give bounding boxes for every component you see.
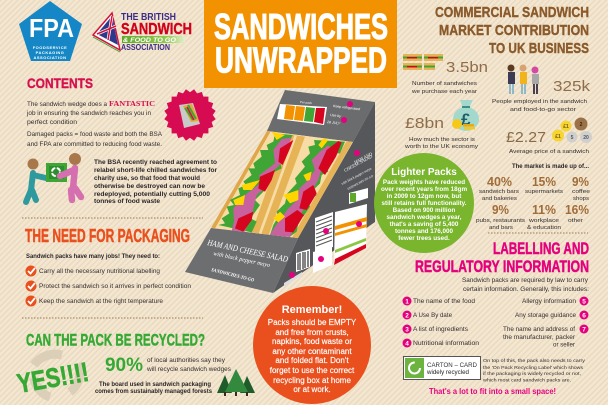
- heading: can the pack be recycled: CAN THE PACK BE RECYCLED?: [26, 330, 205, 350]
- stat: 325k: [492, 78, 591, 113]
- stat: 325k: 325k: [553, 78, 591, 95]
- pack top face: [267, 90, 375, 142]
- top face labels: [277, 100, 361, 126]
- checklist: Carry all the necessary nutritional labelling: [39, 269, 160, 275]
- panel: lighter packs: Pack weights have reduced: [383, 179, 465, 186]
- panel: lighter packs: tonnes and 176,000: [395, 228, 454, 235]
- logo: British Sandwich Association: [93, 12, 192, 52]
- front text: HAM AND CHEESE SALAD: [206, 237, 290, 264]
- stats: market breakdown: shops: [573, 196, 589, 202]
- panel: remember: any other contaminant: [272, 347, 352, 356]
- text: on pack recycling label: On top of this, the pack also needs to carry: [483, 358, 586, 364]
- text: packaging intro: Sandwich packs have many jobs! They need to:: [26, 254, 160, 260]
- text: BSA agreement: otherwise be destroyed can now be: [94, 184, 206, 190]
- text: labelling intro: Sandwich packs are required by law to carry: [462, 278, 588, 284]
- side text: with black pepper mayo: [341, 166, 372, 186]
- panel: remember: [253, 286, 371, 404]
- left filling: [218, 133, 293, 232]
- icon: carton recycling label: CARTON – CARD: [427, 363, 478, 369]
- text: BSA agreement: redeployed, potentially cutting 5,000: [94, 192, 211, 198]
- side text: HAM AND: [352, 151, 374, 165]
- sandwich window: [211, 131, 353, 238]
- panel: lighter packs: Lighter Packs: [391, 167, 457, 178]
- checklist: Keep the sandwich at the right temperature: [39, 299, 164, 305]
- text: contents intro: perfect condition: [27, 120, 77, 126]
- stats: market breakdown: 16%: [565, 202, 589, 217]
- panel: remember: Remember!: [282, 304, 342, 316]
- stat: average price: Average price of a sandwich: [509, 149, 589, 155]
- panel: remember: or at work.: [293, 385, 331, 394]
- list: label requirements: Allergy information: [522, 299, 576, 305]
- text: local authorities: will recycle sandwich wedges: [146, 367, 231, 373]
- stats: market breakdown: 40%: [487, 174, 512, 189]
- panel: remember: napkins, food waste or: [272, 337, 352, 346]
- stat: 325k: People employed in the sandwich: [492, 99, 587, 105]
- stat: 325k: and food-to-go sector: [510, 107, 576, 113]
- stat: 3.5bn: we purchase each year: [411, 89, 477, 95]
- list: label requirements: 2: [405, 312, 409, 320]
- text: yes: YES!!!!: [15, 357, 91, 399]
- stats: market breakdown: & education: [527, 225, 561, 231]
- list: label requirements: Any storage guidance: [515, 313, 577, 319]
- title banner: SANDWICHES: [214, 6, 388, 47]
- panel: lighter packs: sandwich wedges a year,: [387, 214, 462, 221]
- stat: average price: [506, 129, 589, 155]
- heading: need for packaging: THE NEED FOR PACKAGING: [25, 226, 190, 246]
- stats: market breakdown: 15%: [532, 174, 556, 189]
- callout: small space: That's a lot to fit into a small space!: [429, 387, 556, 396]
- stats: market breakdown: 9%: [492, 202, 509, 217]
- pack number badges: [289, 101, 362, 278]
- text: sustainable board: [95, 382, 213, 395]
- side text: SANDWICHES-TO-GO: [347, 174, 374, 191]
- panel: lighter packs: still retains full functionality.: [382, 200, 467, 207]
- stat: 90 percent: 90%: [105, 355, 143, 376]
- checklist: [26, 266, 191, 306]
- icon: coins: 20: [583, 135, 589, 141]
- list: label requirements: A Use By date: [413, 313, 453, 319]
- text: sustainable board: The board used in sandwich packaging: [99, 382, 211, 388]
- list: label requirements: 6: [582, 312, 586, 320]
- icon: money bag: £: [461, 110, 471, 129]
- panel: lighter packs: [374, 153, 474, 253]
- logo: FPA: [19, 1, 82, 61]
- text: contents intro: The sandwich wedge does a: [27, 102, 108, 108]
- text: on pack recycling label: [483, 358, 586, 384]
- icon: people: [508, 64, 539, 94]
- stats: market breakdown: supermarkets: [525, 189, 563, 195]
- list: label requirements: 4: [405, 340, 409, 348]
- panel: lighter packs: Based on 900 million: [393, 207, 455, 214]
- logo: British Sandwich Association: & FOOD TO GO: [123, 38, 176, 44]
- heading: contents: CONTENTS: [27, 75, 93, 91]
- list: label requirements: or seller: [553, 342, 575, 348]
- stats: market breakdown: and bars: [489, 225, 513, 231]
- text: BSA agreement: The BSA recently reached agreement to: [94, 160, 217, 166]
- panel: lighter packs: in 2009 to 12gm now, but: [387, 193, 462, 200]
- icon: coins: 2: [580, 122, 583, 128]
- top face labels: Keep refrigerated: [333, 104, 361, 111]
- front text: with black pepper mayo: [213, 251, 271, 269]
- front text: SANDWICHES-TO-GO: [211, 268, 255, 284]
- pack side face: [273, 102, 375, 293]
- list: label requirements: [402, 296, 588, 348]
- logo: FPA: FPA: [29, 13, 74, 43]
- text: contents intro: Damaged packs = food waste and both the BSA: [27, 132, 162, 138]
- panel: lighter packs: over recent years from 18gm: [381, 186, 467, 193]
- text: contents intro: job in ensuring the sandwich reaches you in: [26, 111, 151, 117]
- icon: money bag: [452, 100, 479, 131]
- text: contents intro: FANTASTIC: [109, 99, 155, 108]
- side text: [341, 151, 374, 191]
- icon: coins: £1: [563, 124, 569, 130]
- text: contents intro: and FPA are committed to reducing food waste.: [27, 142, 162, 148]
- panel: remember: and free from crusts,: [275, 328, 349, 337]
- list: label requirements: 3: [405, 326, 409, 334]
- stats: market breakdown: and bakeries: [482, 196, 517, 202]
- top face labels: Per pack: [300, 100, 313, 105]
- checklist: Protect the sandwich so it arrives in perfect condition: [39, 284, 191, 290]
- text: local authorities: [146, 358, 231, 373]
- list: label requirements: 1: [405, 298, 409, 306]
- list: label requirements: The name and address of: [503, 327, 575, 333]
- text: labelling intro: [462, 278, 589, 293]
- icon: coins: 5: [571, 135, 574, 141]
- icon: carton recycling label: widely recycled: [426, 370, 469, 376]
- icon: recycling arrows behind yes: [34, 354, 80, 397]
- stats: market breakdown: pubs, restaurants: [476, 218, 525, 224]
- panel: remember: recycling box at home: [273, 376, 351, 385]
- text: contents intro: [26, 99, 162, 148]
- stat: 8bn: How much the sector is: [409, 137, 475, 143]
- logo: FPA: FOODSERVICE: [33, 45, 67, 50]
- text: sustainable board: comes from sustainably managed forests: [95, 389, 213, 395]
- stat: 3.5bn: [411, 59, 488, 95]
- right filling: [270, 140, 345, 237]
- logo: FPA: ASSOCIATION: [34, 55, 66, 60]
- stat: 8bn: [404, 115, 478, 150]
- stats: market breakdown: sandwich bars: [479, 189, 519, 195]
- title banner: [204, 0, 397, 88]
- icon: coins: £1: [555, 134, 561, 140]
- icon: people passing recycling box: [26, 153, 81, 202]
- icon: trees: [217, 369, 255, 396]
- title banner: UNWRAPPED: [215, 40, 387, 80]
- list: label requirements: the manufacturer, packer: [503, 335, 575, 341]
- logo: British Sandwich Association: THE BRITISH: [121, 12, 176, 23]
- text: market made up: The market is made up of...: [512, 164, 589, 170]
- text: BSA agreement: [94, 160, 218, 205]
- text: local authorities: of local authorities say they: [147, 358, 225, 364]
- panel: lighter packs: that's a saving of 5,400: [390, 221, 459, 228]
- panel: remember: and folded flat. Don't: [275, 356, 349, 365]
- stat: 8bn: worth to the UK economy: [404, 144, 478, 150]
- stats: market breakdown: 9%: [572, 174, 589, 189]
- stats: market breakdown: other: [568, 218, 583, 224]
- panel: remember: forget to use the correct: [270, 366, 355, 375]
- side text: CHEESE SALAD: [343, 153, 374, 173]
- text: BSA agreement: relabel short-life chilled sandwiches for: [94, 168, 218, 174]
- panel: lighter packs: fewer trees used.: [398, 235, 450, 242]
- stat: 3.5bn: 3.5bn: [446, 59, 488, 76]
- icon: coins: [552, 118, 592, 143]
- list: label requirements: 5: [582, 298, 586, 306]
- stat: average price: £2.27: [506, 129, 546, 146]
- text: BSA agreement: charity use, so that food that would: [94, 176, 200, 182]
- stat: 3.5bn: Number of sandwiches: [412, 81, 477, 87]
- stats: market breakdown: workplace: [528, 218, 559, 224]
- logo: British Sandwich Association: SANDWICH: [121, 21, 192, 38]
- text: BSA agreement: tonnes of food waste: [94, 199, 161, 205]
- text: labelling intro: certain information. Generally, this includes:: [463, 287, 589, 293]
- top face labels: 28 JULY: [326, 120, 341, 126]
- text: on pack recycling label: which most card sandwich packs are.: [483, 378, 571, 384]
- illustration: sandwich pack: [185, 90, 375, 293]
- side face labels: [284, 188, 368, 287]
- stat: 8bn: £8bn: [405, 115, 444, 132]
- heading: market contribution: [435, 4, 589, 57]
- list: label requirements: Nutritional information: [413, 341, 479, 347]
- icon: sandwiches: [403, 54, 443, 70]
- stats: market breakdown: 11%: [532, 202, 556, 217]
- list: label requirements: The name of the food: [413, 299, 475, 305]
- logo: British Sandwich Association: ASSOCIATION: [121, 42, 170, 52]
- list: label requirements: 7: [582, 326, 586, 334]
- pack front face: [185, 228, 298, 293]
- panel: remember: Packs should be EMPTY: [268, 318, 357, 327]
- stats: market breakdown: [476, 174, 590, 231]
- text: on pack recycling label: the 'On Pack Recycling Label' which shows: [483, 365, 584, 371]
- text: on pack recycling label: if the packaging is widely recycled or not,: [483, 371, 581, 377]
- logo: FPA: PACKAGING: [36, 50, 64, 55]
- front text: [206, 237, 290, 284]
- icon: starburst with pack: [164, 89, 216, 141]
- list: label requirements: A list of ingredients: [413, 327, 468, 333]
- stats: market breakdown: coffee: [572, 189, 590, 195]
- heading: labelling: [415, 239, 589, 276]
- top face labels: Use by: [330, 113, 341, 118]
- icon: carton recycling label: [404, 356, 480, 380]
